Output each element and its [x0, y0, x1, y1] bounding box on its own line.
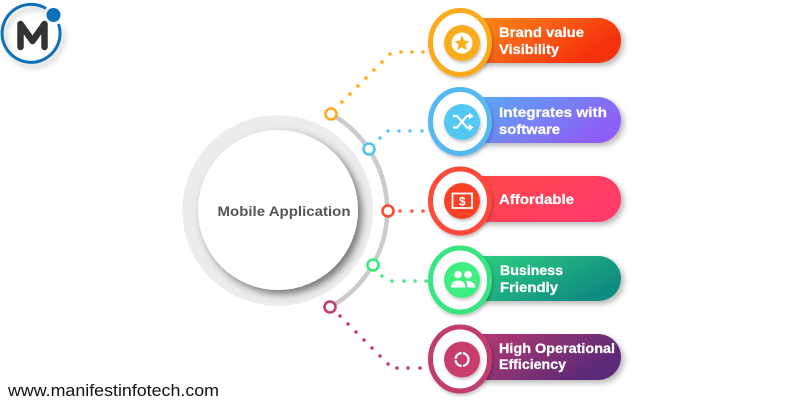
text: Integrates with [499, 105, 607, 120]
website url: www.manifestinfotech.com [7, 382, 219, 400]
item: business friendly [430, 248, 621, 312]
item: integrates with software [430, 90, 621, 154]
pill [450, 97, 621, 143]
item: brand value visibility: Visibility [499, 42, 560, 57]
badge [430, 327, 490, 391]
central circle [182, 115, 373, 306]
pill [450, 18, 621, 63]
item: integrates with software: software [499, 122, 561, 137]
dotted connector: affordable [398, 209, 425, 213]
item: high operational efficiency: Efficiency [499, 357, 567, 372]
dotted connector: business [380, 274, 428, 283]
item: affordable [430, 169, 621, 233]
outer grey ring [182, 115, 373, 306]
badge [430, 90, 490, 154]
node: magenta [324, 302, 336, 312]
center label: Mobile Application [218, 204, 350, 219]
text: High Operational [499, 341, 615, 356]
badge [430, 248, 490, 312]
item: brand value visibility [430, 10, 621, 74]
icon: cycle [444, 342, 480, 378]
text: Affordable [499, 192, 575, 207]
logo letter M [20, 24, 44, 47]
badge [430, 169, 490, 233]
icon: dollar bill [444, 183, 480, 219]
inner white disc [198, 130, 358, 290]
icon: star [444, 25, 480, 61]
dotted connector: efficiency [338, 314, 422, 370]
text: Business [500, 263, 563, 278]
icon: shuffle [444, 104, 480, 140]
node: blue [364, 144, 374, 154]
node: red [382, 206, 394, 216]
logo [2, 4, 60, 62]
icon: dollar bill: $ [459, 194, 466, 208]
connector arc [330, 114, 387, 307]
dotted connector: brand value [340, 50, 425, 104]
icon: people [444, 262, 480, 298]
item: business friendly: Friendly [500, 280, 559, 295]
node: green [368, 260, 378, 270]
pill [450, 334, 621, 380]
text: Brand value [499, 25, 585, 40]
logo dot [46, 8, 60, 22]
logo ring [2, 4, 60, 62]
dotted connector: integrates [378, 129, 424, 140]
node: orange [326, 108, 336, 120]
badge [430, 10, 490, 74]
pill [450, 176, 621, 222]
pill [450, 256, 621, 301]
item: high operational efficiency [430, 327, 621, 391]
